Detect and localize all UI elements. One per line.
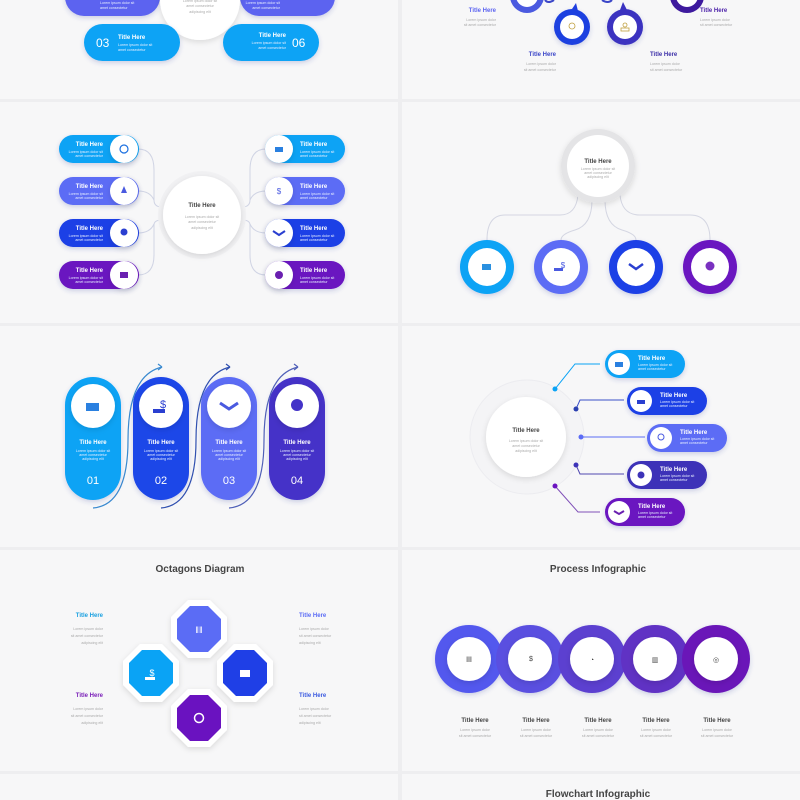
- pill 4: amet consectetur: [660, 478, 688, 482]
- center circle: [160, 0, 240, 40]
- panel: tree diagram right: [460, 129, 737, 294]
- panel: mind map left: [59, 135, 345, 289]
- panel: numbered capsules: [65, 364, 325, 508]
- labels: sit amet consectetur: [520, 734, 553, 738]
- pill 06: 06: [292, 36, 306, 50]
- text top-right: Title Here: [299, 613, 327, 619]
- capsule 03: Lorem ipsum dolor sit: [212, 449, 246, 453]
- center circle: amet consectetur: [186, 4, 215, 8]
- labels: [459, 718, 734, 738]
- left item 4: amet consectetur: [75, 280, 104, 284]
- left item 1: amet consectetur: [75, 154, 104, 158]
- circle chart: [460, 240, 514, 294]
- top circle: Lorem ipsum dolor sit: [581, 167, 615, 171]
- center circle: Title Here: [512, 428, 540, 434]
- right item 4: Title Here: [300, 268, 328, 274]
- labels: Lorem ipsum dolor: [521, 728, 552, 732]
- octagon bottom: [171, 689, 227, 747]
- right item 2: [265, 177, 345, 205]
- pill 4: [627, 461, 707, 489]
- left item 3: [59, 219, 139, 247]
- text bottom-left: Lorem ipsum dolor: [73, 707, 104, 711]
- text bottom-right: [299, 693, 332, 725]
- panel: top-right circles diagram: sit amet consectetur: [700, 23, 733, 27]
- text top-right: [299, 613, 332, 645]
- capsule 01: [65, 377, 121, 500]
- text top-left: [71, 613, 104, 645]
- text blocks: Lorem ipsum dolor: [466, 18, 497, 22]
- panel: octagons diagram: [71, 564, 332, 747]
- capsule 04: 04: [291, 475, 303, 487]
- pill 4: Lorem ipsum dolor sit: [660, 474, 694, 478]
- connectors: [138, 149, 266, 275]
- labels: sit amet consectetur: [459, 734, 492, 738]
- top circle: Title Here: [584, 159, 612, 165]
- pill 2: Lorem ipsum dolor sit: [660, 400, 694, 404]
- circle 4: [670, 0, 704, 13]
- text top-right: sit amet consectetur: [299, 634, 332, 638]
- center circle: Lorem ipsum dolor sit: [185, 215, 219, 219]
- pill 5: Title Here: [638, 504, 666, 510]
- labels: Title Here: [703, 718, 731, 724]
- pill 1: Title Here: [638, 356, 666, 362]
- right item 3: amet consectetur: [300, 238, 328, 242]
- capsule 02: [133, 377, 189, 500]
- pill 05: amet consectetur: [252, 6, 281, 10]
- panel: top-right circles diagram: Lorem ipsum dolor: [650, 62, 681, 66]
- right item 1: amet consectetur: [300, 154, 328, 158]
- text bottom-left: Title Here: [76, 693, 104, 699]
- octagon left: [123, 644, 179, 702]
- pill 03: Lorem ipsum dolor sit: [118, 43, 152, 47]
- left item 2: Title Here: [76, 184, 104, 190]
- text bottom-right: Lorem ipsum dolor: [299, 707, 330, 711]
- text bottom-right: Title Here: [299, 693, 327, 699]
- circle 1: [510, 0, 544, 13]
- text top-right: adipiscing elit: [299, 641, 321, 645]
- capsule 04: adipiscing elit: [286, 457, 308, 461]
- text top-left: Lorem ipsum dolor: [73, 627, 104, 631]
- text top-right: Lorem ipsum dolor: [299, 627, 330, 631]
- center circle: adipiscing elit: [515, 449, 537, 453]
- capsule 02: amet consectetur: [147, 453, 176, 457]
- top circle: [561, 129, 635, 203]
- heading: Octagons Diagram: [156, 564, 245, 575]
- pill 03: 03: [96, 36, 110, 50]
- center circle: amet consectetur: [512, 444, 541, 448]
- left item 4: Title Here: [76, 268, 104, 274]
- center circle: adipiscing elit: [191, 226, 213, 230]
- capsule 03: 03: [223, 475, 235, 487]
- text blocks: Title Here: [469, 8, 497, 14]
- capsule 04: amet consectetur: [283, 453, 312, 457]
- icons: ǁǁ: [466, 657, 472, 664]
- center circle: [158, 171, 246, 259]
- text blocks: [464, 8, 497, 27]
- panel: top-right circles diagram: Title Here: [650, 52, 678, 58]
- labels: Lorem ipsum dolor: [460, 728, 491, 732]
- text top-left: sit amet consectetur: [71, 634, 104, 638]
- right item 2: amet consectetur: [300, 196, 328, 200]
- left item 3: amet consectetur: [75, 238, 104, 242]
- panel: top-right circles diagram: Lorem ipsum dolor: [700, 18, 731, 22]
- right item 2: Title Here: [300, 184, 328, 190]
- connector top: [545, 0, 612, 2]
- icons: ◔: [590, 657, 594, 664]
- panel: top-right circles diagram: Title Here: [529, 52, 557, 58]
- pill 03: Title Here: [118, 35, 146, 41]
- panel: top-right circles diagram: [464, 0, 733, 72]
- text bottom-left: adipiscing elit: [81, 721, 103, 725]
- text bottom-left: sit amet consectetur: [71, 714, 104, 718]
- capsule 01: amet consectetur: [79, 453, 108, 457]
- text bottom-right: adipiscing elit: [299, 721, 321, 725]
- capsule 02: Title Here: [147, 440, 175, 446]
- heading: Process Infographic: [550, 564, 647, 575]
- capsule 01: 01: [87, 475, 99, 487]
- right item 4: [265, 261, 345, 289]
- text blocks: sit amet consectetur: [464, 23, 497, 27]
- pill 03: amet consectetur: [118, 48, 146, 52]
- circle 3 user: [607, 2, 643, 45]
- circle handshake: [609, 240, 663, 294]
- circles: [435, 625, 750, 693]
- right item 1: Lorem ipsum dolor sit: [300, 150, 334, 154]
- connectors: [487, 195, 710, 240]
- capsule 04: Lorem ipsum dolor sit: [280, 449, 314, 453]
- text top-left: adipiscing elit: [81, 641, 103, 645]
- capsule 02: 02: [155, 475, 167, 487]
- center circle: [486, 397, 566, 477]
- left item 4: Lorem ipsum dolor sit: [69, 276, 103, 280]
- labels: Title Here: [522, 718, 550, 724]
- pill 4: Title Here: [660, 467, 688, 473]
- pill 06: Title Here: [259, 33, 287, 39]
- capsule 02: Lorem ipsum dolor sit: [144, 449, 178, 453]
- pill 2: [627, 387, 707, 415]
- text top-left: Title Here: [76, 613, 104, 619]
- left item 1: Lorem ipsum dolor sit: [69, 150, 103, 154]
- pill 5: [605, 498, 685, 526]
- pill 1: amet consectetur: [638, 367, 666, 371]
- center circle: adipiscing elit: [189, 10, 211, 14]
- octagon top: ǁǁ: [195, 625, 203, 635]
- text bottom-left: [71, 693, 104, 725]
- right item 1: [265, 135, 345, 163]
- octagon left: $: [149, 668, 155, 678]
- right item 2: $: [277, 187, 282, 196]
- top circle: adipiscing elit: [587, 175, 609, 179]
- icons: ▥: [652, 657, 658, 664]
- right item 4: Lorem ipsum dolor sit: [300, 276, 334, 280]
- pill 3: amet consectetur: [680, 441, 708, 445]
- labels: sit amet consectetur: [640, 734, 673, 738]
- pill 1: Lorem ipsum dolor sit: [638, 363, 672, 367]
- center circle: Title Here: [188, 203, 216, 209]
- right item 1: Title Here: [300, 142, 328, 148]
- icons: $: [529, 656, 533, 663]
- capsule 04: [269, 377, 325, 500]
- capsule 01: Title Here: [79, 440, 107, 446]
- left item 1: Title Here: [76, 142, 104, 148]
- left item 2: amet consectetur: [75, 196, 104, 200]
- connector lines: [555, 364, 645, 512]
- pill 06: [223, 24, 319, 61]
- capsule 03: Title Here: [215, 440, 243, 446]
- panel: top-left pills diagram: [65, 0, 335, 61]
- capsule 02: adipiscing elit: [150, 457, 172, 461]
- right item 2: Lorem ipsum dolor sit: [300, 192, 334, 196]
- pill 5: amet consectetur: [638, 515, 666, 519]
- labels: Title Here: [642, 718, 670, 724]
- pill 06: amet consectetur: [258, 46, 287, 50]
- pill 5: Lorem ipsum dolor sit: [638, 511, 672, 515]
- pill 3: Lorem ipsum dolor sit: [680, 437, 714, 441]
- heading: flowchart infographic: Flowchart Infographic: [546, 789, 651, 800]
- octagon right: [217, 644, 273, 702]
- capsule 04: Title Here: [283, 440, 311, 446]
- pill 02: [65, 0, 160, 16]
- circle money: $: [561, 261, 566, 270]
- top circle: amet consectetur: [584, 171, 613, 175]
- arrows: [93, 364, 298, 508]
- octagon top: [171, 600, 227, 658]
- left item 2: [59, 177, 139, 205]
- pill 03: [84, 24, 180, 61]
- pill 02: amet consectetur: [100, 6, 128, 10]
- center circle: amet consectetur: [188, 220, 217, 224]
- left item 1: [59, 135, 139, 163]
- left item 3: Title Here: [76, 226, 104, 232]
- panel: top-right circles diagram: sit amet consectetur: [524, 68, 557, 72]
- capsule 02: $: [160, 399, 166, 411]
- capsule 03: adipiscing elit: [218, 457, 240, 461]
- labels: Title Here: [584, 718, 612, 724]
- pill 3: [647, 424, 727, 452]
- right item 3: Title Here: [300, 226, 328, 232]
- pill 2: Title Here: [660, 393, 688, 399]
- pill 02: Lorem ipsum dolor sit: [100, 1, 134, 5]
- right item 4: amet consectetur: [300, 280, 328, 284]
- pill 3: Title Here: [680, 430, 708, 436]
- capsule 03: amet consectetur: [215, 453, 244, 457]
- icons: [466, 656, 719, 664]
- right item 3: [265, 219, 345, 247]
- capsule 01: adipiscing elit: [82, 457, 104, 461]
- pill 05: Lorem ipsum dolor sit: [246, 1, 280, 5]
- labels: Lorem ipsum dolor: [702, 728, 733, 732]
- pill 1: [605, 350, 685, 378]
- icons: ◎: [713, 657, 719, 664]
- panel: connector pills: [470, 350, 727, 526]
- panel: top-right circles diagram: sit amet consectetur: [650, 68, 683, 72]
- panel: process infographic: [435, 564, 750, 738]
- labels: sit amet consectetur: [701, 734, 734, 738]
- center circle: Lorem ipsum dolor sit: [509, 439, 543, 443]
- panel: top-right circles diagram: Lorem ipsum dolor: [526, 62, 557, 66]
- labels: sit amet consectetur: [582, 734, 615, 738]
- labels: Lorem ipsum dolor: [641, 728, 672, 732]
- circle head: [683, 240, 737, 294]
- panel: top-right circles diagram: Title Here: [700, 8, 728, 14]
- pill 2: amet consectetur: [660, 404, 688, 408]
- right item 3: Lorem ipsum dolor sit: [300, 234, 334, 238]
- capsule 01: Lorem ipsum dolor sit: [76, 449, 110, 453]
- pill 05: [240, 0, 335, 16]
- outer faint circle: [470, 380, 584, 494]
- circle 2 bulb: [554, 3, 590, 45]
- left item 3: Lorem ipsum dolor sit: [69, 234, 103, 238]
- pill 06: Lorem ipsum dolor sit: [252, 41, 286, 45]
- capsule 03: [201, 377, 257, 500]
- left item 4: [59, 261, 139, 289]
- text bottom-right: sit amet consectetur: [299, 714, 332, 718]
- left item 2: Lorem ipsum dolor sit: [69, 192, 103, 196]
- circle money: [534, 240, 588, 294]
- labels: Title Here: [461, 718, 489, 724]
- labels: Lorem ipsum dolor: [583, 728, 614, 732]
